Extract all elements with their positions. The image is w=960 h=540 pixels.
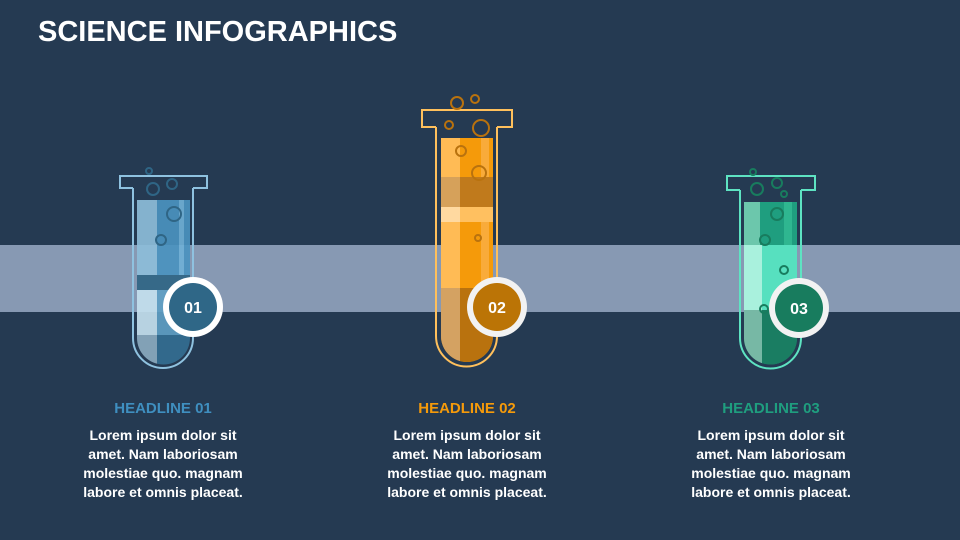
headline 01: HEADLINE 01 <box>114 400 212 417</box>
text 02: molestiae quo. magnam <box>387 465 547 481</box>
tube 1 <box>120 168 207 370</box>
text 03: amet. Nam laboriosam <box>696 446 846 462</box>
text 01: Lorem ipsum dolor sit <box>89 427 236 443</box>
text 03: Lorem ipsum dolor sit <box>697 427 844 443</box>
text 01: molestiae quo. magnam <box>83 465 243 481</box>
text 03: molestiae quo. magnam <box>691 465 851 481</box>
text 01: labore et omnis placeat. <box>83 484 243 500</box>
text 02: Lorem ipsum dolor sit <box>393 427 540 443</box>
badge 02 <box>467 277 527 337</box>
text 02: amet. Nam laboriosam <box>392 446 542 462</box>
badge 01 <box>163 277 223 337</box>
tube 2 <box>422 95 512 370</box>
headline 03: HEADLINE 03 <box>722 400 820 417</box>
badge 03 <box>769 278 829 338</box>
text 02 <box>387 427 547 500</box>
text 01 <box>83 427 243 500</box>
badge 01: 01 <box>184 300 202 317</box>
title: SCIENCE INFOGRAPHICS <box>38 16 397 48</box>
headline 02: HEADLINE 02 <box>418 400 516 417</box>
tube 3 <box>727 169 815 372</box>
text 02: labore et omnis placeat. <box>387 484 547 500</box>
text 03 <box>691 427 851 500</box>
text 01: amet. Nam laboriosam <box>88 446 238 462</box>
badge 03: 03 <box>790 301 808 318</box>
band <box>0 245 960 312</box>
text 03: labore et omnis placeat. <box>691 484 851 500</box>
badge 02: 02 <box>488 300 506 317</box>
